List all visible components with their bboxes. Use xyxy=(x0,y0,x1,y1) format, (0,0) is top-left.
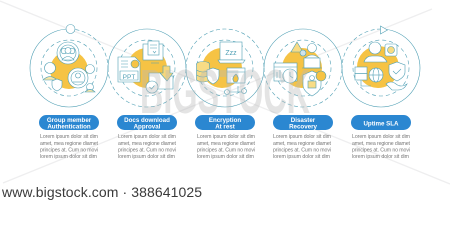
icon: shield lock xyxy=(303,71,326,96)
yellow disc xyxy=(202,48,242,88)
icon: shield in hand xyxy=(386,62,407,90)
stock footer: www.bigstock.com · 388641025 xyxy=(1,184,202,200)
label: docs download: Approval xyxy=(134,124,161,130)
icon: gear xyxy=(385,44,397,56)
text block 5: Lorem ipsum dolor sit dim xyxy=(352,134,410,140)
ring xyxy=(264,29,342,107)
text block 4: amet, mea regione diamet xyxy=(273,141,332,147)
icon: engineer and laptop xyxy=(300,44,322,68)
text block 2: principes at. Cum no movi xyxy=(118,148,176,154)
icon: group ring xyxy=(57,42,79,64)
icon: globe xyxy=(369,68,383,82)
ring xyxy=(186,29,264,107)
text block 2: amet, mea regione diamet xyxy=(118,141,177,147)
label: docs download: Docs download xyxy=(124,117,170,124)
icon: support agent xyxy=(364,42,387,62)
text block 5: principes at. Cum no movi xyxy=(352,148,410,154)
label: docs download xyxy=(117,115,177,130)
icon: laptop sleeping: Zzz xyxy=(225,50,237,57)
icon: server xyxy=(355,67,371,86)
icon: browser chart xyxy=(274,63,297,83)
icon: shield xyxy=(52,79,62,91)
panel: uptime sla xyxy=(342,26,420,107)
panel: group member authentication xyxy=(30,24,108,107)
text block 3: principes at. Cum no movi xyxy=(197,148,255,154)
yellow disc xyxy=(282,48,322,88)
icon: monitor download xyxy=(143,41,163,63)
label: uptime xyxy=(351,115,411,130)
label: disaster recovery: Disaster xyxy=(291,117,316,124)
text block 2: lorem ipsum dolor sit dim xyxy=(118,154,175,160)
ring xyxy=(342,26,420,107)
label: group member xyxy=(39,115,99,130)
text block 3: lorem ipsum dolor sit dim xyxy=(197,154,254,160)
label: group member: Group member xyxy=(47,117,92,124)
text block 3: amet, mea regione diamet xyxy=(197,141,256,147)
text block 1: principes at. Cum no movi xyxy=(40,148,98,154)
icon: shield xyxy=(207,68,219,84)
icon: warning triangle xyxy=(291,42,303,52)
label: uptime: Uptime SLA xyxy=(363,120,399,127)
text block 4: Lorem ipsum dolor sit dim xyxy=(273,134,331,140)
label: encryption xyxy=(195,115,255,130)
panel: encryption at rest xyxy=(186,29,264,107)
text block 4: principes at. Cum no movi xyxy=(273,148,331,154)
icon: right users xyxy=(85,64,95,92)
text block 3: Lorem ipsum dolor sit dim xyxy=(197,134,255,140)
icon: user badge xyxy=(68,68,88,88)
icon: ppt document: PPT xyxy=(123,74,135,81)
text block 5: amet, mea regione diamet xyxy=(352,141,411,147)
yellow disc xyxy=(357,46,399,88)
label: disaster recovery: Recovery xyxy=(289,124,317,130)
text block 5 xyxy=(352,134,411,160)
text block 1: amet, mea regione diamet xyxy=(40,141,99,147)
icon: database xyxy=(196,62,210,82)
icon: left user xyxy=(43,62,57,80)
text block 5: lorem ipsum dolor sit dim xyxy=(352,154,409,160)
text block 3 xyxy=(197,134,256,160)
text block 2 xyxy=(118,134,177,160)
icon: key nodes xyxy=(224,86,246,94)
label: disaster recovery xyxy=(273,115,333,130)
text block 4: lorem ipsum dolor sit dim xyxy=(273,154,330,160)
label: encryption: Encryption xyxy=(209,117,241,124)
label: group member: Authentication xyxy=(47,124,91,130)
icon: encrypted window xyxy=(227,68,245,83)
yellow disc xyxy=(50,51,88,89)
text block 4 xyxy=(273,134,332,160)
text block 1: lorem ipsum dolor sit dim xyxy=(40,154,97,160)
panel: disaster recovery xyxy=(264,29,342,107)
ring xyxy=(30,24,108,107)
text block 1 xyxy=(40,134,99,160)
label: encryption: At rest xyxy=(215,124,235,130)
icon: folder approval xyxy=(146,66,173,93)
panel: docs download approval xyxy=(108,29,186,107)
text block 1: Lorem ipsum dolor sit dim xyxy=(40,134,98,140)
text block 2: Lorem ipsum dolor sit dim xyxy=(118,134,176,140)
ring xyxy=(108,29,186,107)
yellow disc xyxy=(127,48,167,88)
